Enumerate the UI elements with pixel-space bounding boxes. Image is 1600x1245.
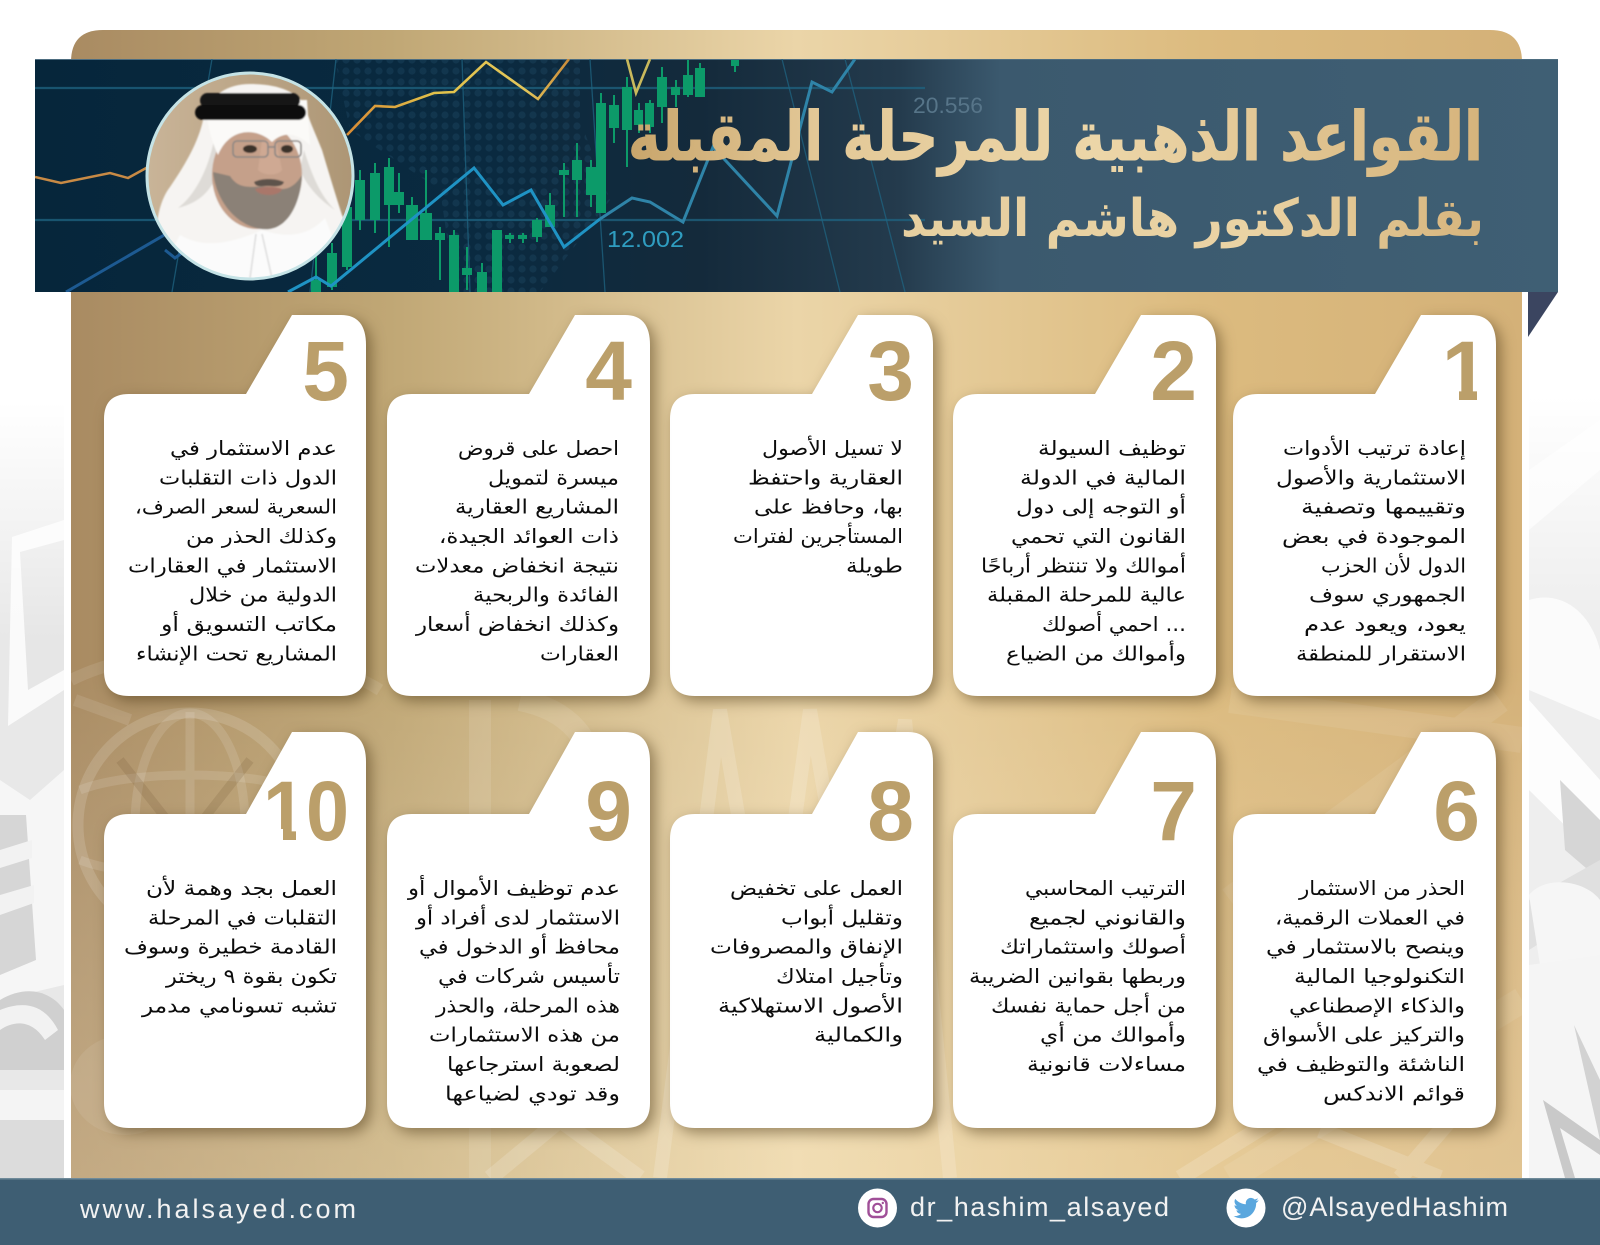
- card 1 text: الموجودة في بعض: [1282, 524, 1466, 549]
- banner dotted map: [335, 60, 610, 292]
- card 10 text: تكون بقوة ٩ ريختر: [165, 964, 337, 988]
- card 1 text: يعود، ويعود عدم: [1304, 612, 1466, 636]
- card 2 text: ... احمي أصولك: [1042, 611, 1186, 637]
- card 6 text: قوائم الاندكس: [1323, 1081, 1465, 1105]
- card 3 text: بها، وحافظ على: [754, 495, 903, 519]
- chart label 12.002: 12.002: [607, 226, 684, 252]
- card 4 text: المشاريع العقارية: [455, 495, 619, 519]
- card 2 text: [981, 436, 1186, 665]
- card 3 text: [733, 436, 903, 577]
- number 8: 8: [867, 764, 914, 858]
- card 8 text: الإنفاق والمصروفات: [710, 935, 903, 959]
- card 6 text: التكنولوجيا المالية: [1294, 964, 1465, 988]
- card 1 text: وتقييمها وتصفية: [1301, 495, 1466, 519]
- card 4 text: نتيجة انخفاض معدلات: [415, 553, 619, 577]
- website: www.halsayed.com: [79, 1194, 356, 1224]
- card 5 text: المشاريع تحت الإنشاء: [136, 641, 337, 665]
- card 9 text: وقد تودي لضياعها: [445, 1081, 620, 1106]
- card 10: [104, 732, 366, 1128]
- card 4 text: [415, 436, 619, 665]
- card 2 text: أموالك ولا تنتظر أرباحًا: [981, 552, 1186, 577]
- number 7: 7: [1150, 764, 1197, 858]
- card 1: [1233, 315, 1496, 696]
- card 6 text: والتركيز على الأسواق: [1263, 1023, 1465, 1047]
- card 8 text: العمل على تخفيض: [730, 876, 903, 900]
- green candlesticks: [311, 60, 739, 292]
- card 9 text: تأسيس شركات في: [438, 962, 620, 989]
- banner grid lines: [35, 59, 925, 292]
- card 9 text: من هذه الاستثمارات: [429, 1023, 620, 1047]
- card 9 text: لصعوبة استرجاعها: [447, 1052, 620, 1076]
- number 5: 5: [302, 324, 349, 418]
- card 4 text: ذات العوائد الجيدة،: [439, 524, 619, 548]
- card 4: [387, 315, 650, 696]
- card 1 text: الاستقرار للمنطقة: [1296, 641, 1466, 665]
- card 3: [670, 315, 933, 696]
- card 7 text: الترتيب المحاسبي: [1025, 876, 1186, 901]
- card 10 text: تشبه تسونامي مدمر: [141, 993, 337, 1018]
- card 8 text: الأصول الاستهلاكية: [718, 993, 903, 1017]
- card 7: [953, 732, 1216, 1128]
- number 1: 1: [1442, 324, 1488, 418]
- card 6 text: في العملات الرقمية،: [1275, 905, 1465, 930]
- card 5 text: الاستثمار في العقارات: [128, 553, 337, 578]
- card 7 text: من أجل حماية نفسك: [991, 992, 1186, 1017]
- card 9 text: عدم توظيف الأموال أو: [407, 875, 620, 900]
- number 6: 6: [1433, 764, 1480, 858]
- card 10 text: العمل بجد وهمة لأن: [146, 876, 337, 900]
- left background pattern: [0, 300, 64, 1178]
- card 2 text: أو التوجه إلى دول: [1016, 494, 1186, 520]
- twitter handle: @AlsayedHashim: [1281, 1192, 1508, 1222]
- card 1 text: الاستثمارية والأصول: [1276, 465, 1466, 489]
- card 9 text: محافظ أو الدخول في: [419, 934, 620, 960]
- card 5 text: مكاتب التسويق أو: [160, 611, 337, 636]
- number 2: 2: [1150, 324, 1197, 418]
- card 6 text: وينصح بالاستثمار في: [1266, 935, 1465, 960]
- card 1 text: الجمهوري سوف: [1309, 583, 1466, 608]
- portrait: [147, 73, 353, 282]
- card 10 text: التقلبات في المرحلة: [148, 905, 337, 930]
- card 5: [104, 315, 366, 696]
- card 10 text: القادمة خطيرة وسوف: [124, 935, 337, 959]
- chart label 20.556: 20.556: [913, 93, 983, 118]
- card 9 text: هذه المرحلة، والحذر: [435, 993, 620, 1017]
- card 6 text: الناشئة والتوظيف في: [1257, 1052, 1465, 1077]
- card 10 text: [124, 876, 337, 1018]
- card 7 text: وربطها بقوانين الضريبة: [969, 964, 1186, 988]
- card 1 text: [1276, 436, 1466, 665]
- card 5 text: الدول ذات التقلبات: [159, 465, 337, 489]
- card 1 text: إعادة ترتيب الأدوات: [1283, 436, 1466, 461]
- card 4 text: الفائدة والربحية: [473, 583, 619, 607]
- card 6 text: والذكاء الإصطناعي: [1289, 993, 1465, 1018]
- card 4 text: وكذلك انخفاض أسعار: [415, 611, 619, 636]
- card 6 text: الحذر من الاستثمار: [1298, 876, 1465, 900]
- card 9 text: [407, 875, 620, 1106]
- card 2 text: المالية في الدولة: [1020, 465, 1186, 490]
- card 8 text: وتقليل أبواب: [781, 904, 903, 929]
- card 6 text: [1257, 876, 1465, 1105]
- card 5 text: عدم الاستثمار في: [170, 436, 337, 461]
- card 4 text: ميسرة لتمويل: [488, 465, 619, 489]
- subtitle: بقلم الدكتور هاشم السيد: [901, 189, 1484, 249]
- icon: twitter: [1226, 1188, 1266, 1228]
- header banner: [35, 59, 1558, 292]
- number 10: 10: [263, 764, 349, 858]
- card 2 text: توظيف السيولة: [1038, 436, 1186, 460]
- orange price line: [35, 59, 650, 183]
- blue price line: [66, 59, 855, 292]
- card 8 text: وتأجيل امتلاك: [776, 962, 903, 988]
- card 7 text: والقانوني لجميع: [1029, 905, 1186, 930]
- card 3 text: لا تسيل الأصول: [762, 436, 903, 460]
- card 9 text: الاستثمار لدى أفراد أو: [415, 904, 620, 929]
- card 7 text: [969, 876, 1186, 1076]
- card 2 text: عالية للمرحلة المقبلة: [987, 583, 1186, 607]
- card 5 text: [128, 436, 337, 665]
- card 7 text: أصولك واستثماراتك: [1000, 934, 1186, 959]
- card 4 text: العقارات: [540, 641, 619, 665]
- card 2 text: القانون التي تحمي: [1011, 524, 1186, 549]
- card 8 text: [710, 876, 903, 1047]
- number 3: 3: [867, 324, 914, 418]
- card 8: [670, 732, 933, 1128]
- card 3 text: العقارية واحتفظ: [748, 465, 903, 489]
- icon: instagram: [858, 1188, 897, 1228]
- card 5 text: وكذلك الحذر من: [186, 524, 337, 548]
- card 4 text: احصل على قروض: [458, 436, 619, 460]
- card 7 text: مساءلات قانونية: [1027, 1052, 1186, 1076]
- right background pattern: [1529, 300, 1600, 1178]
- footer bar: [0, 1178, 1600, 1245]
- card 7 text: وأموالك من أي: [1040, 1022, 1186, 1048]
- card 5 text: الدولية من خلال: [189, 583, 337, 607]
- card 2 text: وأموالك من الضياع: [1006, 640, 1186, 665]
- card 3 text: طويلة: [846, 553, 903, 577]
- card 9: [387, 732, 650, 1128]
- card 6: [1233, 732, 1496, 1128]
- number 9: 9: [585, 764, 632, 858]
- card 2: [953, 315, 1216, 696]
- number 4: 4: [585, 324, 632, 418]
- card 8 text: والكمالية: [814, 1023, 903, 1047]
- card 5 text: السعرية لسعر الصرف،: [135, 495, 337, 519]
- card 3 text: المستأجرين لفترات: [733, 522, 903, 548]
- ribbon fold: [1528, 292, 1558, 337]
- card 1 text: الدول لأن الحزب: [1321, 553, 1466, 577]
- instagram handle: dr_hashim_alsayed: [910, 1192, 1169, 1222]
